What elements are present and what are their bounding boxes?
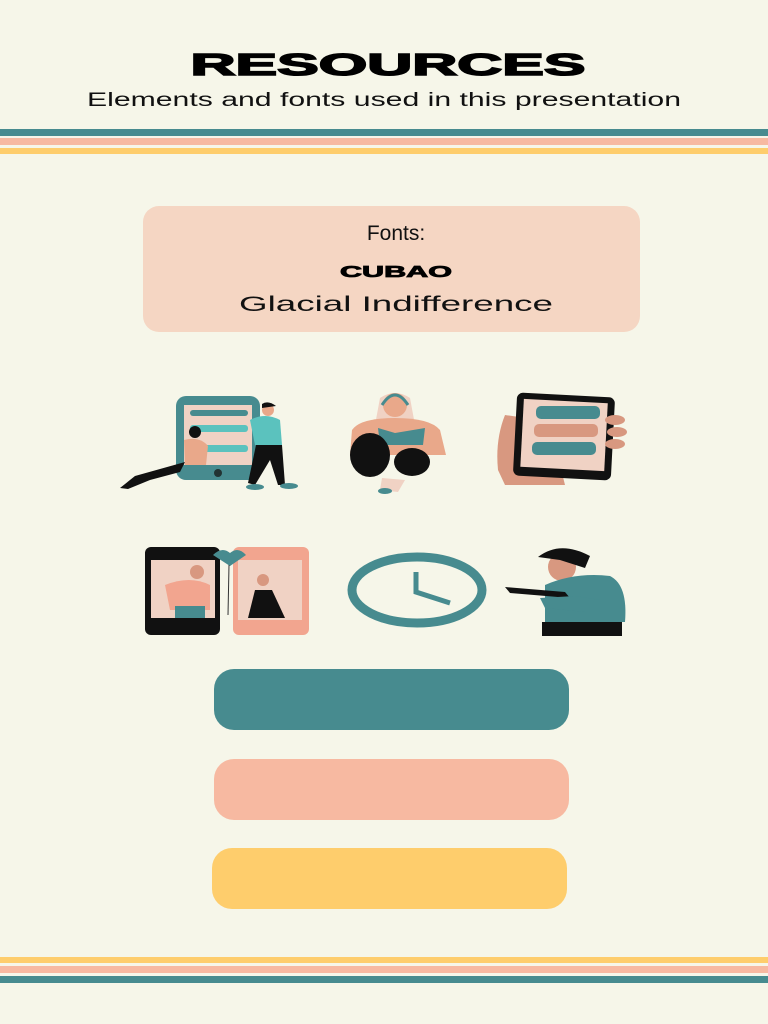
top stripes [0, 129, 768, 154]
bottom stripes [0, 957, 768, 983]
title: RESOURCES [190, 47, 586, 82]
bar: pink [214, 759, 569, 820]
icon: person reading with headphones [350, 393, 446, 494]
icon: man writing on tablet [505, 548, 625, 636]
icon: two phones with balloon [145, 547, 309, 635]
bar: yellow [212, 848, 567, 909]
bar: teal [214, 669, 569, 730]
subtitle: Elements and fonts used in this presentation [87, 90, 681, 111]
icon: hand holding tablet [497, 392, 627, 485]
panel: fonts: CUBAO [340, 264, 452, 281]
icon: people chatting with phone [120, 396, 298, 490]
icon: clock [352, 557, 482, 623]
panel: fonts [143, 206, 640, 332]
panel: fonts: Fonts: [367, 222, 425, 245]
panel: fonts: Glacial Indifference [239, 293, 553, 316]
